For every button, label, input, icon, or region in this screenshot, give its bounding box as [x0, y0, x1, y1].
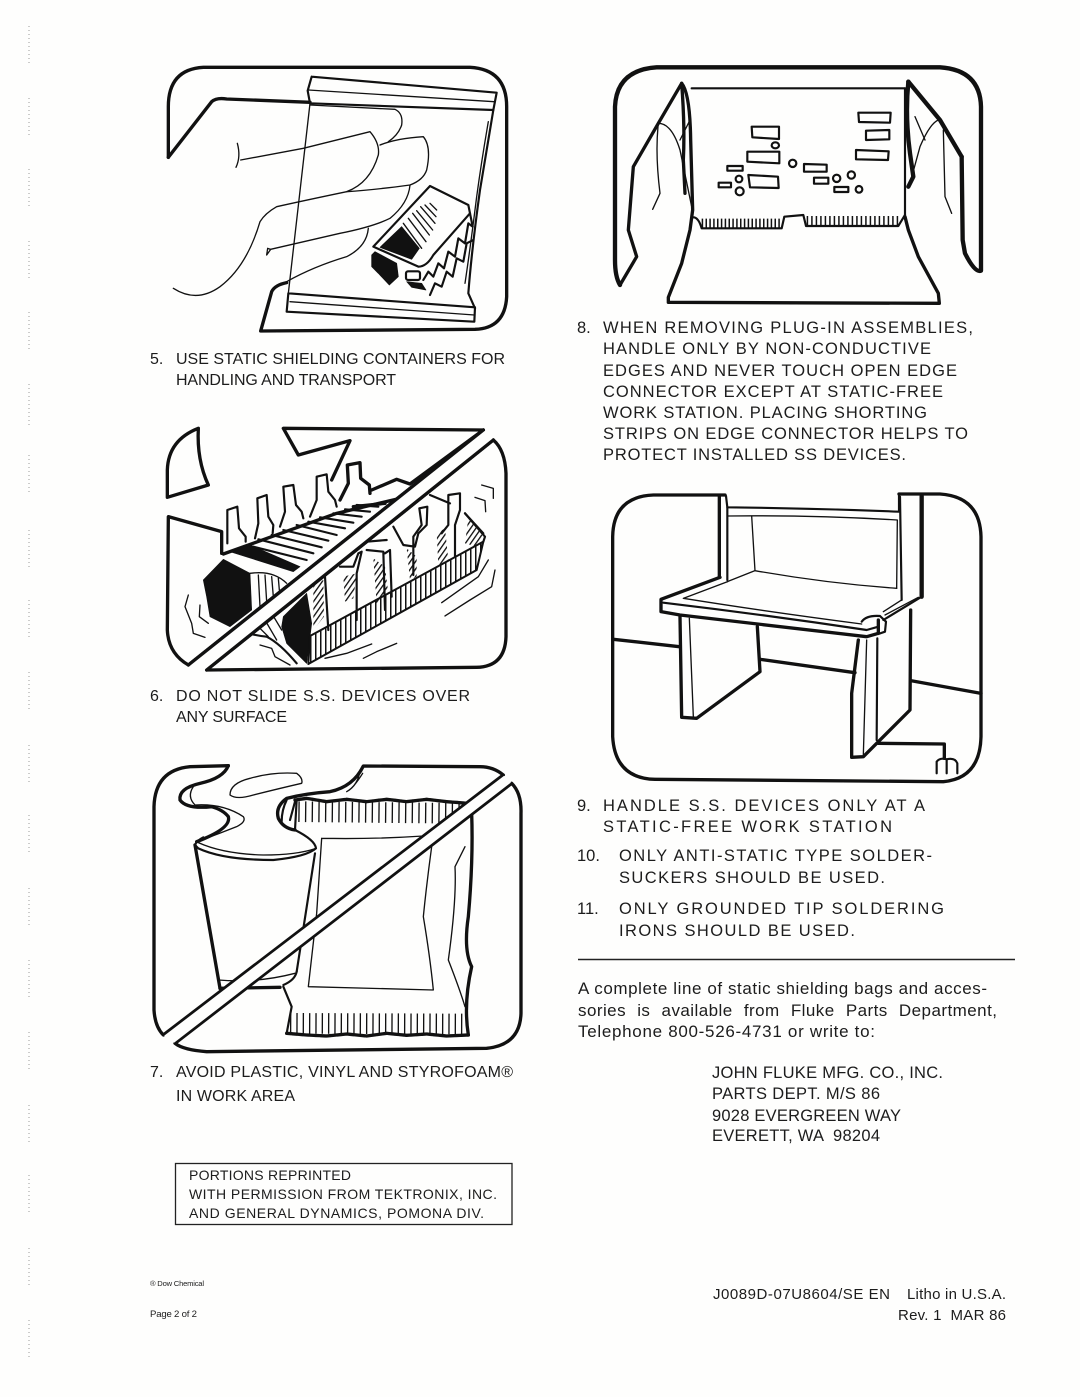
- step 9 text: 9.: [577, 797, 591, 815]
- step 5 text: [150, 351, 505, 389]
- paragraph: availability of shielding bags: Telephone 800-526-4731 or write to:: [578, 1022, 875, 1041]
- step 9 text: HANDLE S.S. DEVICES ONLY AT A: [603, 797, 925, 815]
- sub-element: motion squiggles: [185, 485, 495, 665]
- sub-element: steam: [180, 766, 363, 842]
- sub-element: tray with cards: [308, 493, 485, 664]
- step 11 text: 11.: [577, 900, 599, 918]
- step 11 text: ONLY GROUNDED TIP SOLDERING: [619, 900, 944, 918]
- sub-element: black stack ends: [203, 559, 312, 663]
- step 8 text: PROTECT INSTALLED SS DEVICES.: [603, 446, 906, 464]
- mailing address: EVERETT, WA 98204: [712, 1127, 880, 1145]
- part number and revision: J0089D-07U8604/SE EN: [713, 1286, 890, 1303]
- step 8 text: WORK STATION. PLACING SHORTING: [603, 404, 927, 422]
- step 8 text: WHEN REMOVING PLUG-IN ASSEMBLIES,: [603, 319, 973, 337]
- step 11 text: IRONS SHOULD BE USED.: [619, 922, 855, 940]
- part number and revision: [713, 1286, 1006, 1324]
- step 8 text: HANDLE ONLY BY NON-CONDUCTIVE: [603, 340, 931, 358]
- sub-element: prohibition slash: [163, 775, 512, 1043]
- step 5 text: 5.: [150, 351, 163, 368]
- sub-element: ridged top of stack: [223, 498, 400, 572]
- sub-element: floor lines: [613, 639, 981, 693]
- sub-element: circuit board: [692, 88, 905, 228]
- mailing address: PARTS DEPT. M/S 86: [712, 1085, 880, 1103]
- step 10 text: [577, 847, 932, 887]
- step 8 text: EDGES AND NEVER TOUCH OPEN EDGE: [603, 362, 957, 380]
- paragraph: availability of shielding bags: [578, 979, 997, 1041]
- icon: integrated circuit chip: [372, 186, 473, 295]
- step 7 text: [150, 1064, 513, 1105]
- step 5 text: HANDLING AND TRANSPORT: [176, 372, 396, 389]
- paragraph: availability of shielding bags: A complete line of static shielding bags and acces-: [578, 979, 987, 998]
- panel: hand holding chip in shielding bag: [168, 67, 507, 331]
- sub-element: prohibition slash: [188, 430, 493, 670]
- icon: ground connection: [878, 743, 957, 773]
- sub-element: bench legs: [680, 610, 911, 757]
- step 9 text: [577, 797, 925, 836]
- mailing address: 9028 EVERGREEN WAY: [712, 1107, 901, 1125]
- part number and revision: Litho in U.S.A.: [907, 1286, 1006, 1303]
- step 10 text: SUCKERS SHOULD BE USED.: [619, 869, 885, 887]
- sub-element: device pins behind the slash: [227, 463, 370, 543]
- part number and revision: Rev. 1 MAR 86: [898, 1307, 1006, 1324]
- step 6 text: DO NOT SLIDE S.S. DEVICES OVER: [176, 688, 470, 705]
- step 6 text: ANY SURFACE: [176, 709, 287, 726]
- notice box: portions reprinted: [176, 1164, 512, 1224]
- step 10 text: ONLY ANTI-STATIC TYPE SOLDER-: [619, 847, 932, 865]
- sub-element: styrofoam cup: [195, 830, 316, 988]
- step 8 text: 8.: [577, 319, 591, 337]
- sub-element: fringed vinyl mat: [283, 798, 472, 1036]
- notice box: portions reprinted: WITH PERMISSION FROM TEKTRONIX, INC.: [189, 1186, 497, 1202]
- step 10 text: 10.: [577, 847, 600, 865]
- trademark footnote: ® Dow Chemical: [150, 1279, 204, 1288]
- page number: Page 2 of 2: [150, 1309, 197, 1320]
- step 9 text: STATIC-FREE WORK STATION: [603, 818, 892, 836]
- step 8 text: [577, 319, 973, 464]
- panel: avoid plastic, vinyl and styrofoam, prohibited illustration: [154, 766, 521, 1052]
- step 7 text: AVOID PLASTIC, VINYL AND STYROFOAM®: [176, 1064, 513, 1081]
- notice box: portions reprinted: PORTIONS REPRINTED: [189, 1167, 351, 1183]
- mailing address: [712, 1064, 943, 1145]
- panel: do not slide devices, prohibited illustration: [167, 428, 506, 670]
- step 6 text: 6.: [150, 688, 163, 705]
- sub-element: finger lines: [653, 117, 952, 213]
- step 8 text: CONNECTOR EXCEPT AT STATIC-FREE: [603, 383, 943, 401]
- step 8 text: STRIPS ON EDGE CONNECTOR HELPS TO: [603, 425, 968, 443]
- panel: hands holding circuit board by its edges: [615, 67, 981, 303]
- panel: grounded static-free work station: [613, 494, 981, 782]
- sub-element: bench back: [719, 494, 922, 600]
- step 7 text: 7.: [150, 1064, 163, 1081]
- sub-element: bench seat: [661, 571, 922, 637]
- step 7 text: IN WORK AREA: [176, 1088, 295, 1105]
- mailing address: JOHN FLUKE MFG. CO., INC.: [712, 1064, 943, 1082]
- notice box: portions reprinted: AND GENERAL DYNAMICS, POMONA DIV.: [189, 1205, 484, 1221]
- step 5 text: USE STATIC SHIELDING CONTAINERS FOR: [176, 351, 505, 368]
- step 11 text: [577, 900, 944, 940]
- step 6 text: [150, 688, 470, 726]
- paragraph: availability of shielding bags: sories is available from Fluke Parts Department,: [578, 1001, 997, 1020]
